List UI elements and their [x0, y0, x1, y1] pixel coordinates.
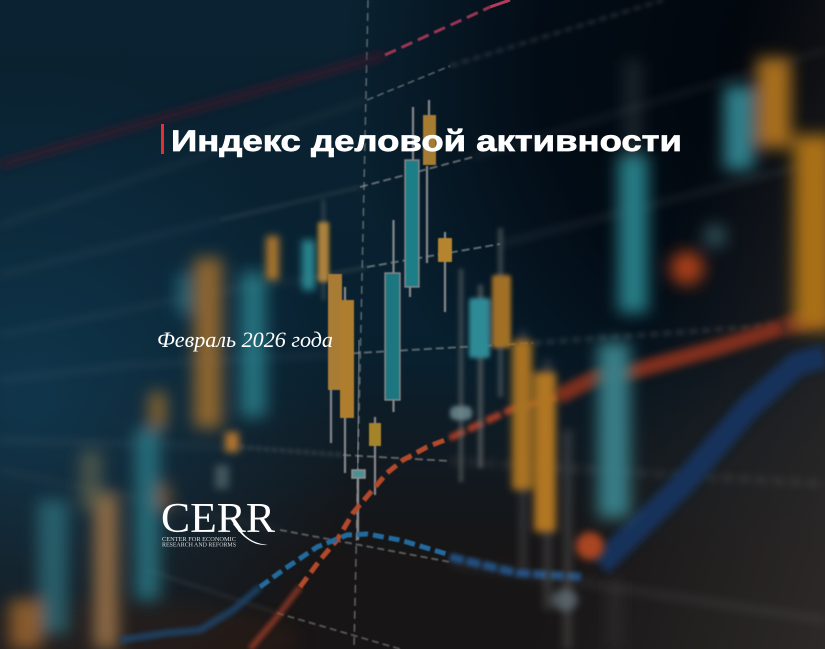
title accent bar — [161, 124, 164, 154]
title: Индекс деловой активности — [171, 125, 682, 158]
red curve — [250, 315, 825, 649]
logo wordmark: CERR — [161, 496, 275, 542]
blue curve — [120, 356, 825, 640]
logo tagline: RESEARCH AND REFORMS — [162, 542, 237, 548]
logo tagline: CENTER FOR ECONOMIC — [162, 536, 236, 543]
mid-blur candles — [215, 236, 315, 489]
top red dashed line — [0, 0, 510, 165]
candle wicks — [331, 100, 445, 540]
CERR logo — [161, 496, 275, 548]
logo swoosh — [233, 522, 268, 545]
date subtitle: Февраль 2026 года — [157, 327, 333, 352]
blurred candles left — [10, 258, 266, 649]
blurred candles centre-right — [450, 228, 511, 482]
sharp candles — [328, 100, 452, 540]
